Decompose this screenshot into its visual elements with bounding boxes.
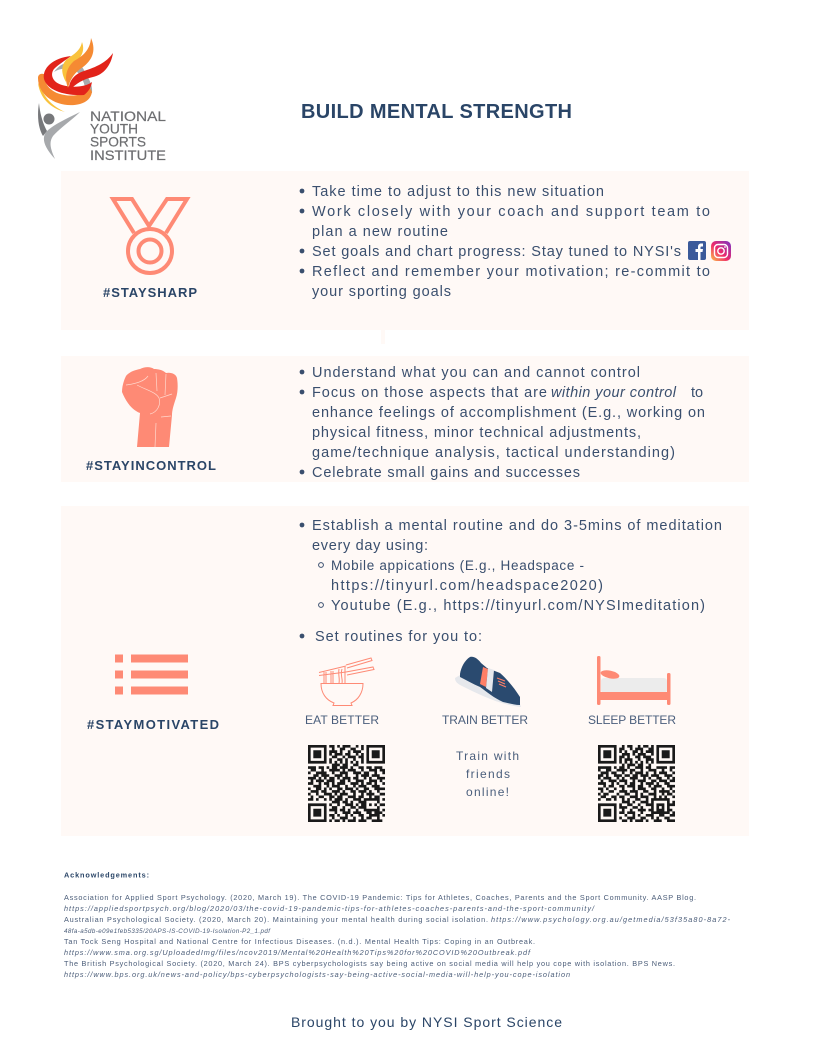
references text block (64, 893, 731, 979)
bullet list: stay sharp: Reflect and remember your motivation; re-commit to (312, 264, 710, 280)
logo: National Youth Sports Institute (38, 38, 166, 163)
icon: bed (597, 656, 670, 705)
panel: stay in control (61, 356, 749, 482)
bullet list: stay in control (300, 365, 705, 481)
bullet list: stay motivated: Youtube (E.g., https://tinyurl.com/NYSImeditation) (331, 598, 705, 614)
footer credit: Brought to you by NYSI Sport Science (291, 1014, 562, 1030)
acknowledgements heading: Acknowledgements: (64, 870, 149, 880)
icon: facebook (688, 241, 706, 260)
bullet list: stay motivated: Establish a mental routine and do 3-5mins of meditation (312, 518, 722, 534)
bullet list: stay in control: enhance feelings of accomplishment (E.g., working on (312, 405, 705, 421)
label: sleep better: SLEEP BETTER (588, 713, 676, 727)
bullet list: stay motivated: Mobile appications (E.g., Headspace - (331, 558, 584, 573)
bullet list: stay in control: Understand what you can and cannot control (312, 365, 640, 381)
text: train with friends online: friends (466, 767, 510, 781)
panel: stay sharp (61, 171, 749, 344)
bullet list: stay sharp: Set goals and chart progress: Stay tuned to NYSI's (312, 244, 681, 260)
text: train with friends online (456, 749, 519, 799)
references text block: Tan Tock Seng Hospital and National Centre for Infectious Diseases. (n.d.). Mental Health Tips: Coping in an Outbreak. (64, 937, 535, 946)
references text block: 48fa-a5db-e09e1feb5335/20APS-IS-COVID-19-Isolation-P2_1.pdf (64, 928, 271, 935)
references text block: https://www.sma.org.sg/UploadedImg/files/ncov2019/Mental%20Health%20Tips%20for%20COVID%20Outbreak.pdf (64, 948, 531, 957)
bullet list: stay motivated (300, 518, 722, 645)
references text block: Association for Applied Sport Psychology. (2020, March 19). The COVID-19 Pandemic: Tips for Athletes, Coaches, Parents and the Sport Community. AASP Blog. (64, 893, 696, 902)
references text block: https://appliedsportpsych.org/blog/2020/03/the-covid-19-pandemic-tips-for-athletes-coaches-parents-and-the-sport-community/ (64, 904, 595, 913)
bullet list: stay sharp: Work closely with your coach and support team to (312, 204, 710, 220)
references text block: https://www.psychology.org.au/getmedia/53f35a80-8a72- (491, 915, 731, 924)
icon: medal (113, 199, 187, 273)
bullet list: stay sharp: your sporting goals (312, 284, 451, 300)
references text block: The British Psychological Society. (2020, March 24). BPS cyberpsychologists say being active on social media will help you cope with isolation. BPS News. (64, 959, 675, 968)
title: BUILD MENTAL STRENGTH (301, 101, 572, 123)
references text block: https://www.bps.org.uk/news-and-policy/bps-cyberpsychologists-say-being-active-social-media-will-help-you-cope-isolation (64, 970, 570, 979)
text: train with friends online: online! (466, 785, 509, 799)
panel: stay motivated (61, 506, 749, 836)
logo: National Youth Sports Institute: YOUTH (90, 120, 138, 136)
references text block: Australian Psychological Society. (2020, March 20). Maintaining your mental health during social isolation. (64, 915, 488, 924)
bullet list: stay in control: Celebrate small gains and successes (312, 465, 580, 481)
hashtag: stay sharp: #STAYSHARP (103, 285, 197, 300)
bullet list: stay sharp (300, 184, 710, 300)
QR code: eat better (308, 745, 385, 822)
label: eat better: EAT BETTER (305, 713, 379, 727)
bullet list: stay motivated: every day using: (312, 538, 428, 554)
bullet list: stay in control: within your control (551, 385, 677, 401)
icon: noodle bowl (319, 658, 374, 706)
logo: National Youth Sports Institute: INSTITUTE (90, 147, 166, 163)
bullet list: stay in control: physical fitness, minor technical adjustments, (312, 425, 641, 441)
bullet list: stay in control: game/technique analysis, tactical understanding) (312, 445, 675, 461)
hashtag: stay motivated: #STAYMOTIVATED (87, 717, 219, 732)
bullet list: stay sharp: plan a new routine (312, 224, 448, 240)
icon: list (115, 654, 188, 694)
icon: instagram (711, 241, 731, 261)
icon: raised fist (122, 367, 178, 447)
label: train better: TRAIN BETTER (442, 713, 528, 727)
bullet list: stay in control: Focus on those aspects that are (312, 385, 547, 401)
bullet list: stay motivated: Set routines for you to: (315, 629, 482, 645)
logo: National Youth Sports Institute: NATIONAL (90, 108, 166, 124)
bullet list: stay motivated: https://tinyurl.com/headspace2020) (331, 578, 603, 594)
QR code: sleep better (598, 745, 675, 822)
bullet list: stay sharp: Take time to adjust to this new situation (312, 184, 604, 200)
bullet list: stay in control: to (691, 385, 703, 401)
text: train with friends online: Train with (456, 749, 519, 763)
logo: National Youth Sports Institute: SPORTS (90, 134, 146, 150)
hashtag: stay in control: #STAYINCONTROL (86, 458, 216, 473)
icon: running shoe (455, 657, 521, 707)
